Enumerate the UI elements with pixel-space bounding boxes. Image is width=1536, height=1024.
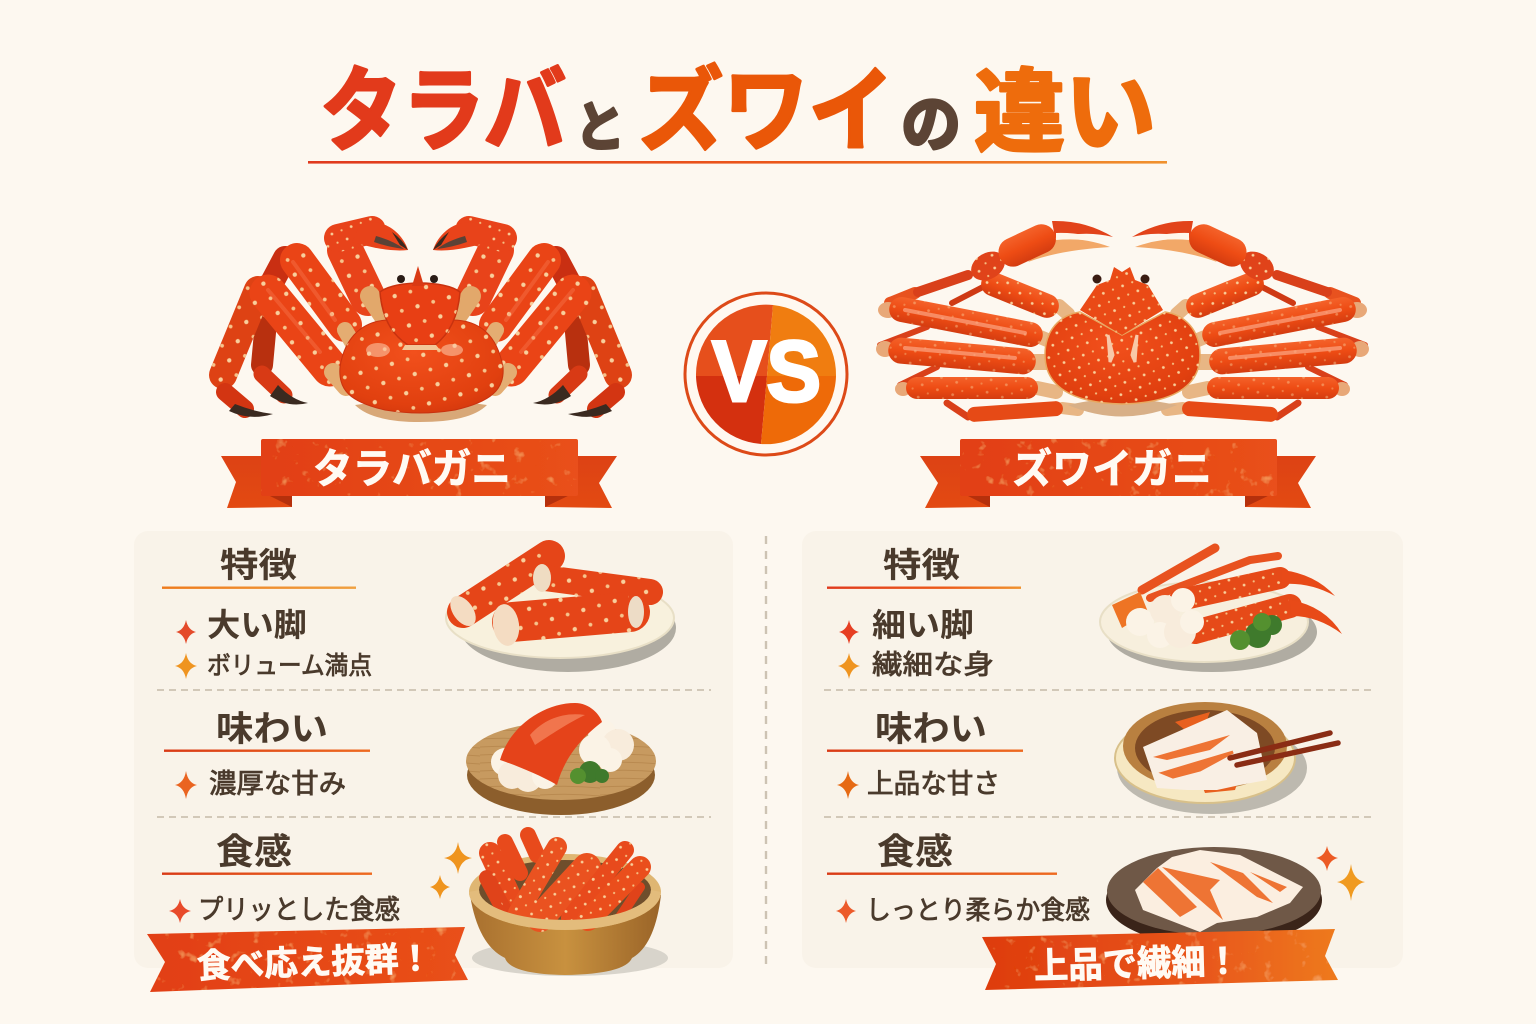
sparkles [1316, 846, 1365, 901]
VS badge: VS [712, 324, 821, 420]
dish: king crab legs on plate [445, 556, 676, 672]
dish: king crab meat on wood board [466, 703, 656, 815]
heading: 特徴: 特徴 [883, 547, 960, 585]
heading: 食感: 食感 [216, 831, 292, 872]
panel: ズワイガニ [802, 531, 1403, 968]
list: 大い脚 / ボリューム満点 [175, 607, 372, 680]
right ribbon: ズワイガニ [920, 439, 1316, 508]
list: 濃厚な甘み: 濃厚な甘み [209, 769, 346, 799]
heading: 特徴: 特徴 [220, 547, 297, 585]
snow crab illustration [876, 220, 1369, 422]
title: の [901, 91, 961, 160]
heading: 味わい: 味わい [875, 710, 987, 749]
callout ribbon: 上品で繊細！ [982, 929, 1338, 990]
panel: タラバガニ [134, 531, 733, 968]
list: 大い脚 / ボリューム満点: ボリューム満点 [207, 652, 372, 680]
right ribbon: ズワイガニ: ズワイガニ [1012, 446, 1212, 492]
sparkles [430, 842, 472, 899]
title: タラバ [320, 61, 566, 163]
list: 細い脚 / 繊細な身: 繊細な身 [872, 650, 994, 680]
dish: king crab legs in wooden bowl [469, 835, 668, 976]
VS badge [685, 293, 847, 455]
list: 上品な甘さ: 上品な甘さ [867, 769, 1000, 799]
title: ズワイ [638, 61, 894, 163]
dish: snow crab legs on plate [1100, 548, 1342, 672]
callout ribbon: 上品で繊細！: 上品で繊細！ [1034, 940, 1241, 987]
title [308, 61, 1167, 164]
dish: snow crab meat on dark plate [1106, 847, 1322, 946]
list: 細い脚 / 繊細な身 [838, 607, 994, 680]
list: しっとり柔らか食感: しっとり柔らか食感 [866, 895, 1090, 925]
title: と [575, 98, 625, 158]
king crab illustration [223, 222, 618, 422]
callout ribbon: 食べ応え抜群！ [147, 927, 468, 992]
list: 大い脚 / ボリューム満点: 大い脚 [207, 607, 307, 643]
callout ribbon: 食べ応え抜群！: 食べ応え抜群！ [197, 940, 433, 986]
dish: snow crab meat with chopsticks [1115, 702, 1338, 814]
title: 違い [974, 63, 1156, 164]
heading: 味わい: 味わい [216, 710, 328, 749]
left ribbon: タラバガニ: タラバガニ [313, 446, 511, 492]
heading: 食感: 食感 [877, 831, 953, 872]
left ribbon: タラバガニ [221, 439, 617, 508]
center dashed divider [765, 536, 767, 964]
list: プリッとした食感: プリッとした食感 [198, 895, 400, 925]
list: 細い脚 / 繊細な身: 細い脚 [872, 607, 974, 643]
